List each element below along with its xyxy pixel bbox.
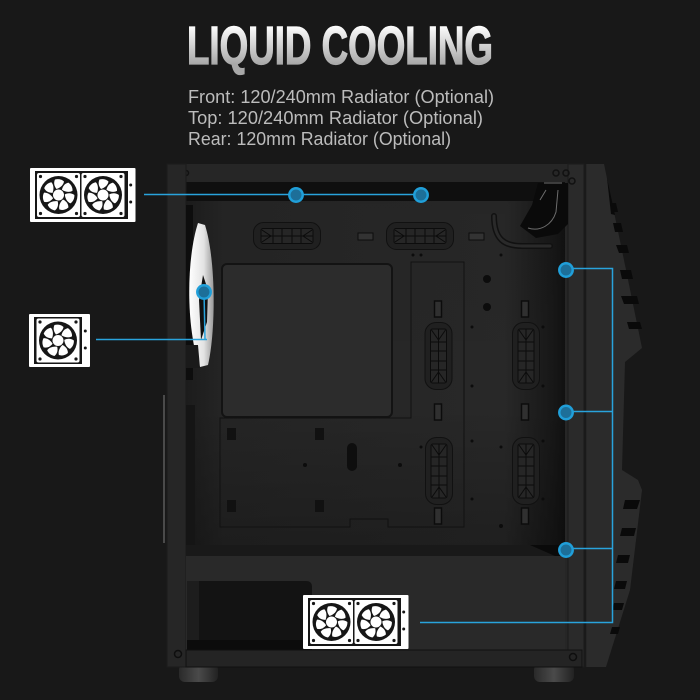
text block: radiator options: Front: 120/240mm Radiator (Optional) — [188, 87, 494, 107]
top radiator slot — [186, 182, 565, 216]
case frame — [167, 164, 587, 667]
connector: rear — [96, 285, 211, 340]
front panel — [585, 164, 642, 667]
rear fan — [186, 205, 214, 380]
cable slot and cables — [494, 183, 568, 246]
standoff panel — [220, 262, 464, 527]
icon: rear radiator — [29, 314, 90, 367]
left inner rail — [167, 164, 186, 667]
motherboard tray — [186, 183, 568, 545]
PC case — [163, 164, 642, 682]
motherboard cutout — [222, 264, 392, 417]
PSU opening — [187, 581, 312, 640]
text block: radiator options: Top: 120/240mm Radiator (Optional) — [188, 108, 483, 128]
PSU shroud — [174, 545, 582, 667]
small slots — [358, 233, 528, 524]
connector: top — [144, 188, 428, 202]
icon: top radiator — [30, 168, 136, 222]
icon: front radiator — [303, 595, 408, 649]
mounting points — [227, 254, 544, 528]
text block: radiator options: Rear: 120mm Radiator (Optional) — [188, 129, 451, 149]
connector: front — [420, 263, 612, 622]
case feet — [179, 664, 574, 682]
text block: radiator options — [188, 87, 494, 149]
cable grommets — [254, 222, 540, 504]
top rail screws — [178, 170, 575, 184]
title: LIQUID COOLING — [187, 16, 493, 76]
bottom rail — [186, 650, 582, 667]
